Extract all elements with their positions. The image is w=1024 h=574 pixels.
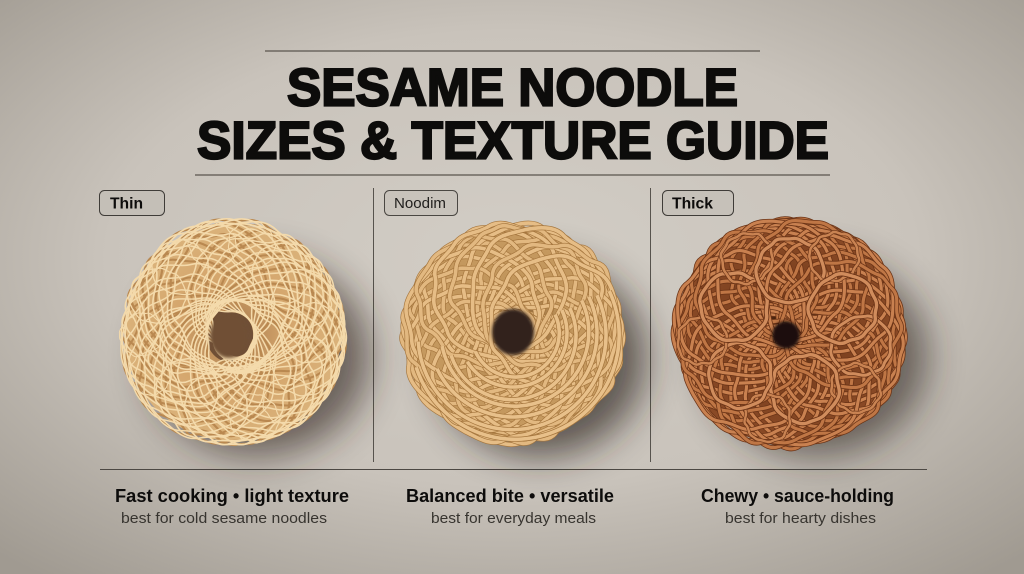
caption: thin: best for cold sesame noodles [121, 510, 327, 527]
noodle nest: thick [620, 156, 959, 486]
caption: medium: best for everyday meals [431, 510, 596, 527]
label: Noodim [384, 190, 458, 216]
caption: thin [115, 485, 349, 527]
tangled loops [826, 310, 896, 380]
caption: thick [701, 485, 894, 527]
panel: medium noodles [362, 175, 664, 527]
label: Noodim: Noodim [394, 196, 446, 212]
panel: thin noodles [38, 138, 412, 527]
column divider left [372, 188, 374, 462]
caption: medium: Balanced bite • versatile [406, 485, 614, 506]
title [195, 51, 830, 175]
caption: thin: Fast cooking • light texture [115, 485, 349, 506]
caption: thick: best for hearty dishes [725, 510, 876, 527]
label: Thin [100, 190, 164, 216]
label: Thin: Thin [110, 196, 143, 212]
label: Thick [662, 190, 734, 216]
label: Thick: Thick [672, 196, 713, 212]
title: SESAME NOODLE [287, 58, 738, 118]
noodle nest: medium [362, 175, 664, 487]
panel: thick noodles [620, 156, 959, 527]
concentric strands lower right [377, 197, 653, 474]
caption: medium [406, 485, 614, 527]
noodle nest: thin [38, 138, 412, 511]
caption: thick: Chewy • sauce-holding [701, 485, 894, 506]
column divider right [650, 188, 652, 462]
title: SIZES & TEXTURE GUIDE [197, 112, 829, 170]
footer rule [100, 468, 927, 470]
